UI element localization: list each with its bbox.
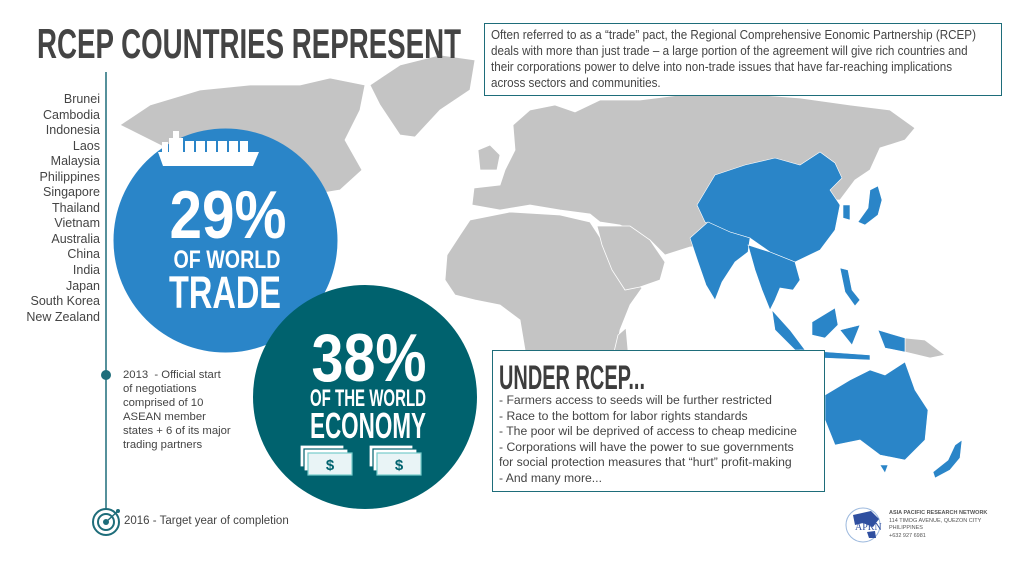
- country list: Japan: [66, 279, 100, 293]
- country list: Philippines: [40, 170, 100, 184]
- country list: India: [73, 263, 100, 277]
- Arabia: [597, 226, 665, 290]
- list of impacts: [499, 393, 797, 484]
- icon: cargo ship: [158, 131, 259, 166]
- country list: Laos: [73, 139, 100, 153]
- icon: money stacks: [300, 445, 421, 475]
- country list: Singapore: [43, 185, 100, 199]
- list of impacts: - Farmers access to seeds will be further restricted: [499, 393, 772, 407]
- country list: Malaysia: [51, 154, 100, 168]
- timeline text 2013: comprised of 10: [123, 397, 203, 409]
- Indonesia / Malaysia: [772, 310, 805, 350]
- UK: [478, 145, 500, 170]
- China: [697, 152, 842, 262]
- timeline text 2013: states + 6 of its major: [123, 425, 231, 437]
- timeline dot 2013: [101, 370, 111, 380]
- intro text box: Often referred to as a “trade” pact, the Regional Comprehensive Eonomic Partnership (RCEP): [491, 28, 976, 42]
- Greenland: [370, 55, 475, 137]
- Africa: [445, 212, 642, 440]
- circle: 38% of the world economy: $: [395, 457, 404, 474]
- country list: [26, 92, 100, 324]
- icon: target: [93, 509, 120, 535]
- timeline text 2013: 2013 - Official start: [123, 369, 221, 381]
- logo: APRN: +632 927 6981: [889, 532, 926, 538]
- timeline text 2013: ASEAN member: [123, 411, 206, 423]
- list of impacts: for social protection measures that “hurt” profit-making: [499, 455, 792, 469]
- logo: APRN: APRN: [855, 522, 882, 533]
- circle: 29% of world trade: OF WORLD: [174, 246, 280, 274]
- country list: New Zealand: [26, 310, 100, 324]
- timeline text 2013: trading partners: [123, 439, 202, 451]
- logo: APRN: 114 TIMOG AVENUE, QUEZON CITY: [889, 518, 981, 524]
- panel: under RCEP: [492, 350, 825, 492]
- country list: Indonesia: [46, 123, 100, 137]
- timeline: [92, 72, 120, 536]
- intro text box: across sectors and communities.: [491, 76, 661, 90]
- logo: APRN: [846, 508, 988, 542]
- list of impacts: - Corporations will have the power to sue governments: [499, 440, 794, 454]
- list of impacts: - And many more...: [499, 470, 602, 484]
- intro text box: [484, 23, 1002, 96]
- intro text box: deals with more than just trade – a large portion of the agreement will give rich countries and: [491, 44, 968, 58]
- North America: [120, 78, 365, 200]
- circle: 29% of world trade: 29%: [170, 177, 286, 253]
- Madagascar: [614, 328, 628, 365]
- Australia: [825, 362, 928, 460]
- timeline text 2013: [123, 369, 231, 451]
- Papua: [905, 338, 945, 358]
- circle: 38% of the world economy: [253, 285, 477, 509]
- country list: Australia: [51, 232, 100, 246]
- circle: 38% of the world economy: 38%: [312, 320, 426, 396]
- country list: South Korea: [30, 294, 100, 308]
- timeline text 2016: 2016 - Target year of completion: [124, 515, 289, 527]
- Eurasia: [472, 92, 915, 255]
- Philippines: [840, 268, 860, 306]
- country list: Vietnam: [54, 216, 100, 230]
- Korea / Japan: [843, 205, 850, 220]
- logo: APRN: ASIA PACIFIC RESEARCH NETWORK: [889, 510, 987, 516]
- SE Asia mainland: [748, 245, 800, 310]
- circle: 29% of world trade: TRADE: [169, 267, 281, 318]
- logo: APRN: PHILIPPINES: [889, 525, 923, 531]
- intro text box: their corporations power to delve into non-trade issues that have far-reaching implications: [491, 60, 952, 74]
- country list: Cambodia: [43, 108, 100, 122]
- list of impacts: - Race to the bottom for labor rights standards: [499, 408, 748, 422]
- country list: Thailand: [52, 201, 100, 215]
- country list: China: [67, 247, 100, 261]
- New Zealand: [933, 440, 962, 478]
- list of impacts: - The poor wil be deprived of access to cheap medicine: [499, 424, 797, 438]
- country list: Brunei: [64, 92, 100, 106]
- India: [690, 222, 750, 300]
- timeline text 2013: of negotiations: [123, 383, 196, 395]
- circle: 38% of the world economy: $: [326, 457, 335, 474]
- circle: 29% of world trade: [114, 128, 338, 352]
